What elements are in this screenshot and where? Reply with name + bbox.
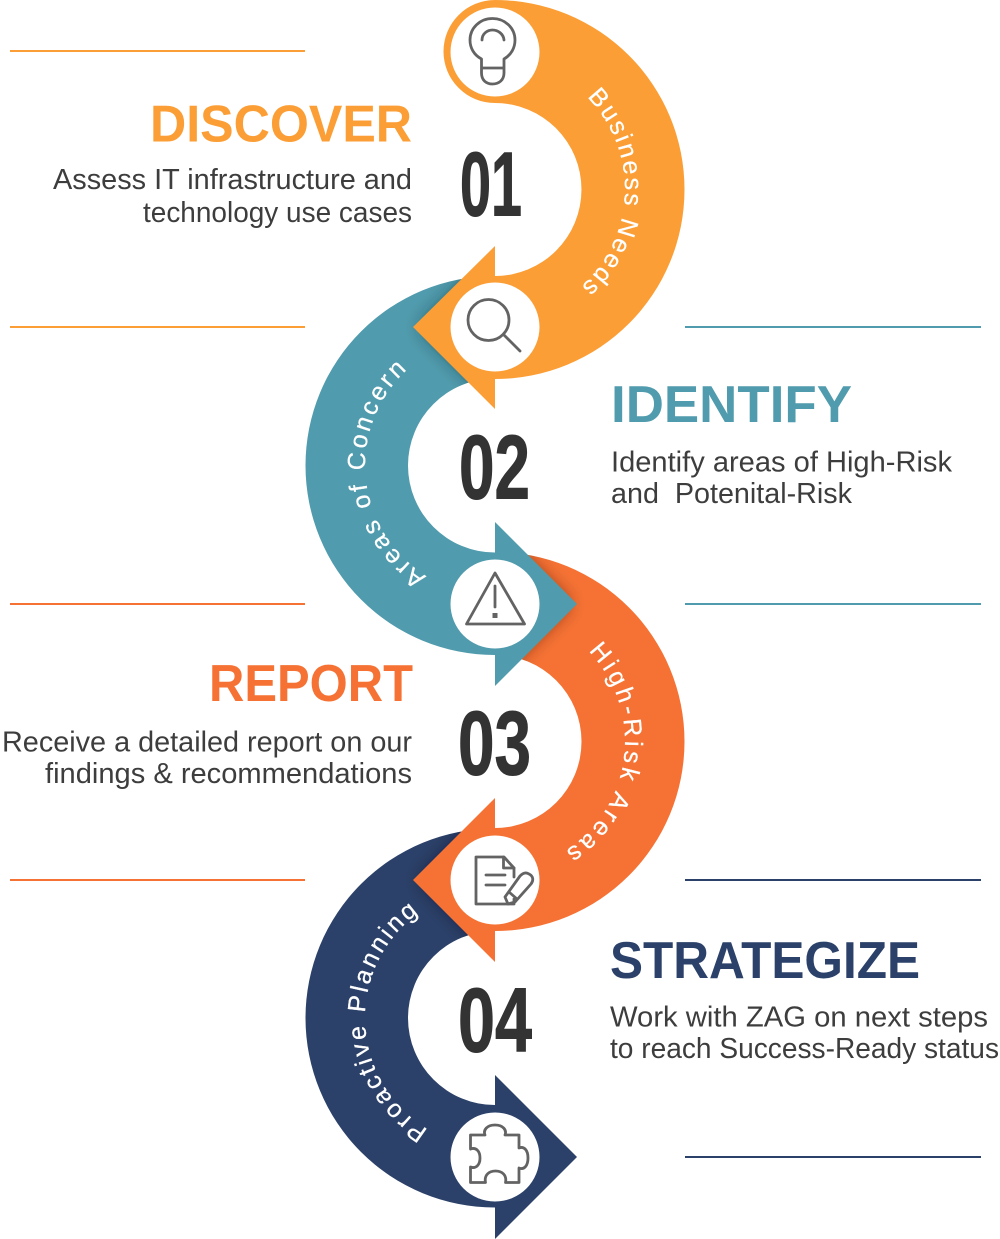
icon: puzzle piece [470, 1125, 528, 1182]
white icon circle: top [450, 8, 540, 96]
step 1 arrow: Business Needs [413, 0, 684, 409]
body line 1: Work with ZAG on next steps [610, 1002, 988, 1034]
heading: DISCOVER: DISCOVER [150, 96, 412, 154]
icon: warning triangle [466, 573, 524, 624]
step 3 arrow: High-Risk Areas [413, 554, 684, 962]
text block: Identify [611, 376, 952, 510]
body line 1: Receive a detailed report on our [2, 726, 412, 758]
heading: IDENTIFY: IDENTIFY [611, 376, 852, 434]
red-orange arc arrow [413, 552, 684, 962]
body line 2: technology use cases [143, 197, 412, 229]
step 4 arrow: Proactive Planning [306, 832, 577, 1239]
icon: document and pen [476, 857, 533, 904]
text block: Report [2, 655, 413, 790]
icon: light bulb [470, 18, 515, 84]
white icon circle [450, 1112, 540, 1202]
curved label: Proactive Planning: Proactive Planning [348, 904, 427, 1143]
navy arc arrow [306, 828, 577, 1239]
curved label: Business Needs: Business Needs [583, 86, 638, 294]
text block: Strategize [610, 932, 999, 1065]
heading: STRATEGIZE: STRATEGIZE [610, 932, 920, 990]
number 03: 03 [458, 694, 531, 794]
shadow under teal arrow [522, 555, 578, 662]
body line 2: and Potenital-Risk [611, 478, 852, 510]
shadow under orange arrow [416, 832, 468, 937]
heading: REPORT: REPORT [209, 655, 413, 713]
number 04: 04 [458, 970, 532, 1072]
white icon circle: bottom [450, 282, 540, 372]
white icon circle [450, 836, 540, 924]
teal arc arrow [306, 276, 577, 686]
icon: magnifying glass [468, 300, 520, 351]
body line 2: findings & recommendations [45, 758, 412, 790]
step 2 arrow: Areas of Concern [306, 278, 577, 686]
shadow under orange arrow [413, 279, 468, 386]
orange arc arrow [413, 0, 684, 409]
curved label: Areas of Concern: Areas of Concern [348, 362, 426, 586]
body line 2: to reach Success-Ready status [610, 1033, 999, 1065]
number 02: 02 [459, 418, 530, 518]
body line 1: Assess IT infrastructure and [53, 164, 412, 196]
body line 1: Identify areas of High-Risk [611, 446, 952, 478]
text block: Discover [53, 96, 412, 229]
number 01: 01 [460, 134, 522, 236]
white icon circle [450, 560, 540, 648]
curved label: High-Risk Areas: High-Risk Areas [568, 641, 644, 860]
